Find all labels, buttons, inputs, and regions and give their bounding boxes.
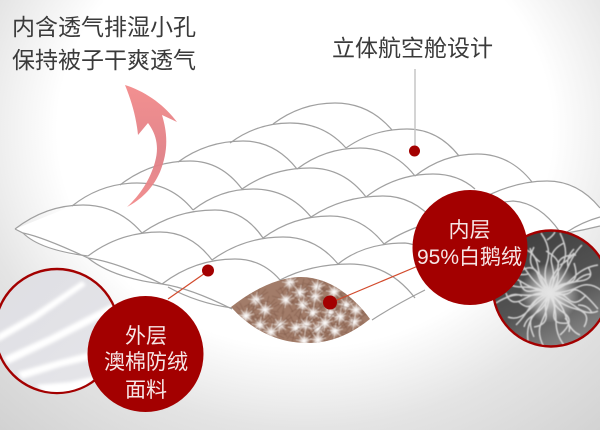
- badge: outer fabric: [88, 296, 204, 412]
- badge: inner down: [412, 190, 528, 305]
- marker: chamber design: [409, 146, 420, 156]
- marker: outer fabric: [202, 264, 214, 276]
- heading: ventilation holes: 内含透气排湿小孔: [12, 14, 196, 40]
- badge: inner down: 95%白鹅绒: [417, 246, 522, 269]
- badge: inner down: 内层: [448, 219, 490, 242]
- badge: outer fabric: 面料: [125, 379, 167, 402]
- down filling cross-section: [231, 277, 370, 343]
- heading: ventilation holes: 保持被子干爽透气: [12, 47, 196, 73]
- fiber closeup circle: [493, 230, 600, 347]
- badge: outer fabric: 澳棉防绒: [104, 351, 188, 374]
- quilted duvet: [15, 103, 600, 343]
- leader line: outer fabric: [168, 271, 208, 299]
- heading: 3D chamber design: 立体航空舱设计: [332, 35, 493, 61]
- duvet white fill: [15, 103, 600, 343]
- heading: ventilation holes: [12, 14, 196, 73]
- quilt seams: [15, 103, 600, 320]
- badge: outer fabric: 外层: [125, 325, 167, 348]
- fabric swatch circle: [0, 269, 119, 396]
- leader line: chamber design: [414, 69, 416, 150]
- marker: inner down: [323, 296, 337, 310]
- leader line: inner down: [330, 266, 418, 303]
- arrow: breathable airflow: [125, 85, 177, 207]
